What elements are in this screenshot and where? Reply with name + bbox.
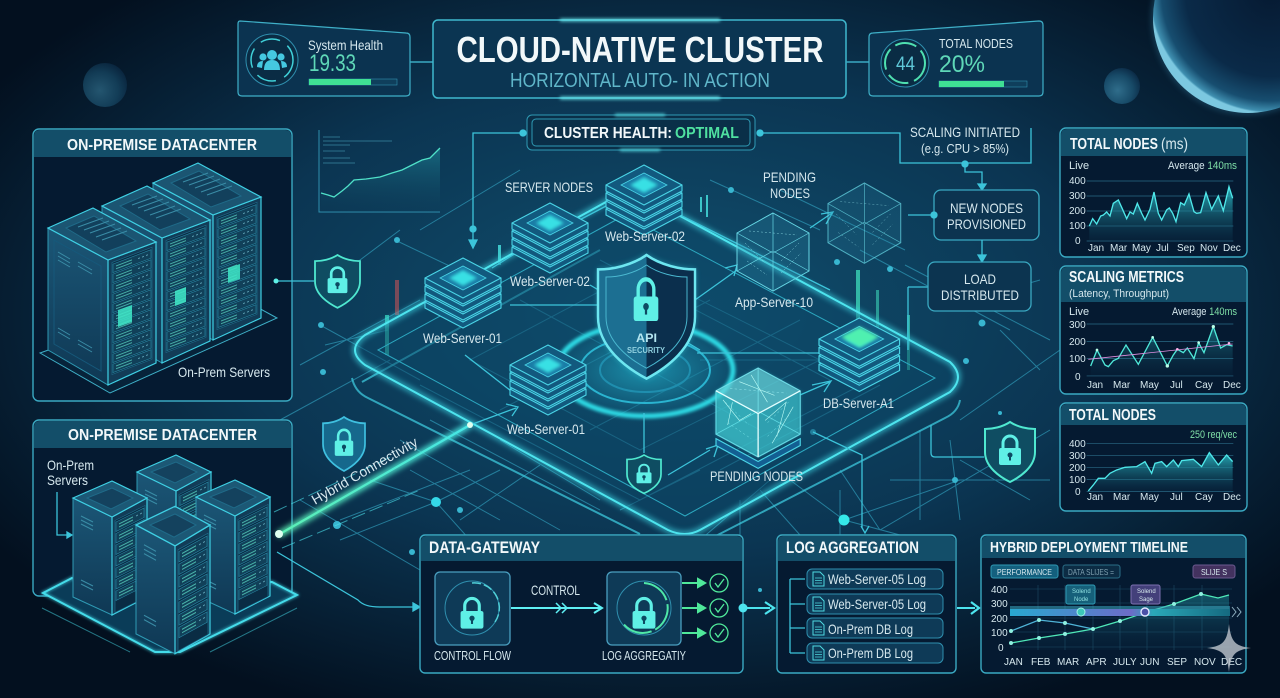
axis labels: 0 bbox=[998, 643, 1004, 654]
axis labels: NOV bbox=[1194, 657, 1216, 668]
axis labels: APR bbox=[1086, 657, 1107, 668]
area chart bbox=[1087, 443, 1233, 492]
cube: App-Server-10 bbox=[737, 213, 809, 291]
step: new nodes provisioned: NEW NODES bbox=[950, 200, 1023, 216]
axis labels: 200 bbox=[1069, 206, 1086, 217]
shield: bottom center bbox=[627, 455, 661, 493]
axis labels: 100 bbox=[1069, 221, 1086, 232]
text: control flow: CONTROL FLOW bbox=[434, 648, 512, 663]
log row 2 bbox=[807, 594, 943, 614]
panel: total nodes chart bbox=[1060, 128, 1247, 257]
shield: left bbox=[274, 255, 360, 308]
callout: solend node: Solend bbox=[1072, 589, 1091, 595]
background network grid bbox=[280, 170, 1060, 570]
heading: SCALING METRICS bbox=[1069, 269, 1184, 286]
step: new nodes provisioned bbox=[934, 190, 1039, 240]
callout: solend sage: Solend bbox=[1137, 589, 1156, 595]
panel: on-premise datacenter bottom bbox=[33, 420, 297, 654]
text: throughput: 250 req/vec bbox=[1190, 429, 1237, 441]
server rack back bbox=[137, 455, 211, 589]
axis labels: 400 bbox=[1069, 439, 1086, 450]
heading: ON-PREMISE DATACENTER bbox=[67, 137, 257, 154]
axis labels: 100 bbox=[991, 628, 1008, 639]
node: Web-Server-01 upper bbox=[425, 258, 501, 328]
step: load distributed: LOAD bbox=[964, 271, 996, 287]
floor platform bbox=[42, 578, 297, 652]
heading: HYBRID DEPLOYMENT TIMELINE bbox=[990, 539, 1188, 556]
panel: hybrid deployment timeline bbox=[981, 535, 1246, 673]
server rack C bbox=[153, 163, 261, 340]
axis labels bbox=[991, 585, 1242, 668]
axis labels: Dec bbox=[1223, 243, 1241, 254]
text: total nodes: TOTAL NODES bbox=[939, 36, 1013, 51]
server rack A bbox=[48, 208, 156, 385]
panel: total nodes throughput chart bbox=[1060, 403, 1247, 511]
line chart bbox=[1087, 181, 1233, 241]
log row 1: Web-Server-05 Log bbox=[828, 571, 926, 587]
callout: solend node bbox=[1066, 585, 1095, 604]
callout: solend sage bbox=[1131, 585, 1160, 604]
axis labels: Cay bbox=[1195, 380, 1213, 391]
floor base bbox=[40, 288, 277, 393]
axis labels: Dec bbox=[1223, 492, 1241, 503]
axis labels: DEC bbox=[1221, 657, 1242, 668]
scatter network nodes bbox=[318, 187, 1002, 592]
axis labels: 300 bbox=[1069, 191, 1086, 202]
axis labels: 100 bbox=[1069, 475, 1086, 486]
node: Web-Server-02 lower bbox=[512, 203, 588, 273]
caption: On-Prem bbox=[47, 457, 94, 473]
caption second line: Servers bbox=[47, 472, 88, 488]
planet: small top right bbox=[1104, 68, 1140, 104]
axis labels: Jul bbox=[1156, 243, 1169, 254]
text: log aggregatiy: LOG AGGREGATIY bbox=[602, 648, 686, 663]
text: live: Live bbox=[1069, 160, 1089, 172]
planet: large top right bbox=[1151, 0, 1280, 115]
axis labels: 300 bbox=[991, 599, 1008, 610]
icon: gauge ring: 44 bbox=[896, 54, 915, 75]
shield: hybrid bbox=[323, 417, 365, 471]
button: slije s bbox=[1193, 565, 1235, 578]
step connector bbox=[908, 212, 986, 350]
axis labels: Jul bbox=[1170, 380, 1183, 391]
arrow: gateway to log bbox=[738, 602, 774, 614]
icon: sparkle watermark bbox=[1207, 624, 1251, 672]
axis labels: Nov bbox=[1200, 243, 1218, 254]
scaling initiated text: (e.g. CPU > 85%) bbox=[921, 141, 1009, 156]
axis labels: JUN bbox=[1140, 657, 1159, 668]
button: performance: PERFORMANCE bbox=[997, 567, 1052, 577]
axis labels: 200 bbox=[991, 614, 1008, 625]
axis labels: 0 bbox=[1075, 487, 1081, 498]
axis labels: Dec bbox=[1223, 380, 1241, 391]
text: average: Average 140ms bbox=[1172, 306, 1237, 318]
scaling initiated text: SCALING INITIATED bbox=[910, 124, 1020, 140]
connector: to data gateway bbox=[277, 552, 420, 611]
label: SECURITY: SECURITY bbox=[627, 346, 666, 355]
axis labels: 300 bbox=[1069, 451, 1086, 462]
axis labels bbox=[1069, 439, 1241, 503]
status highlights bbox=[118, 264, 240, 327]
cluster health badge bbox=[527, 115, 755, 150]
text: cluster health: CLUSTER HEALTH: bbox=[544, 125, 672, 142]
mini background chart bbox=[319, 130, 440, 212]
text: db server: DB-Server-A1 bbox=[823, 395, 894, 411]
icon: gauge ring bbox=[881, 39, 929, 87]
text: control: CONTROL bbox=[531, 582, 580, 598]
system health card bbox=[238, 21, 433, 96]
server rack right bbox=[196, 480, 270, 614]
axis labels: 400 bbox=[991, 585, 1008, 596]
panel: on-premise datacenter top bbox=[33, 129, 292, 401]
arrow: control bbox=[511, 603, 602, 613]
caption arrow bbox=[57, 492, 72, 538]
text: web server 02 upper: Web-Server-02 bbox=[605, 228, 685, 244]
text: system health: System Health bbox=[308, 37, 383, 53]
heading unit: (ms) bbox=[1161, 136, 1188, 153]
security rings bbox=[553, 322, 737, 418]
axis labels: JULY bbox=[1113, 657, 1137, 668]
text: nodes: NODES bbox=[770, 185, 810, 201]
cube: pending upper bbox=[828, 183, 901, 263]
log row 3 bbox=[807, 618, 943, 638]
button: data slices: DATA SLIJES = bbox=[1068, 567, 1114, 577]
heading: TOTAL NODES bbox=[1069, 407, 1156, 424]
server rack left bbox=[73, 481, 147, 615]
panel: data gateway bbox=[420, 535, 743, 673]
log row 2: Web-Server-05 Log bbox=[828, 596, 926, 612]
text: web server 01 lower: Web-Server-01 bbox=[507, 421, 585, 437]
heading: ON-PREMISE DATACENTER bbox=[68, 427, 257, 444]
axis labels: MAR bbox=[1057, 657, 1079, 668]
arrow: log to timeline bbox=[957, 602, 979, 614]
subtitle: HORIZONTAL AUTO- IN ACTION bbox=[510, 69, 770, 92]
cube: pending lower bright bbox=[716, 368, 800, 468]
node: DB-Server-A1 bbox=[819, 318, 900, 392]
tile: log aggregation lock bbox=[607, 572, 681, 645]
timeline chart bbox=[1009, 585, 1241, 650]
axis labels: 0 bbox=[1075, 236, 1081, 247]
candle decorations bbox=[385, 195, 910, 370]
tree connector bbox=[790, 579, 805, 653]
hybrid connectivity beam bbox=[274, 422, 473, 548]
text: optimal: OPTIMAL bbox=[675, 125, 739, 142]
axis labels: Jan bbox=[1088, 243, 1104, 254]
server rack front bbox=[136, 506, 210, 654]
status checks bbox=[682, 574, 728, 642]
heading: LOG AGGREGATION bbox=[786, 538, 919, 557]
axis labels: 300 bbox=[1069, 320, 1086, 331]
text: live: Live bbox=[1069, 306, 1089, 318]
axis labels: Mar bbox=[1113, 380, 1131, 391]
axis labels: 200 bbox=[1069, 463, 1086, 474]
planet: small top left bbox=[83, 63, 127, 107]
connector: cluster health to web server bbox=[469, 130, 526, 248]
title box bbox=[433, 20, 846, 98]
label: API: API bbox=[636, 331, 657, 345]
panel: scaling metrics chart bbox=[1060, 266, 1247, 394]
text: web server 02 lower: Web-Server-02 bbox=[510, 273, 590, 289]
text: percentage: 20% bbox=[939, 51, 985, 78]
line chart bbox=[1087, 324, 1233, 376]
text: app server: App-Server-10 bbox=[735, 294, 813, 310]
icon: lock bbox=[634, 279, 658, 321]
axis labels: Mar bbox=[1113, 492, 1131, 503]
subheading: (Latency, Throughput) bbox=[1069, 288, 1169, 300]
tile: control flow lock bbox=[435, 572, 510, 645]
main API security shield bbox=[598, 255, 695, 379]
total nodes card bbox=[846, 21, 1043, 96]
axis labels: SEP bbox=[1167, 657, 1187, 668]
axis labels: 0 bbox=[1075, 372, 1081, 383]
text: server nodes: SERVER NODES bbox=[505, 179, 593, 195]
progress bar bbox=[309, 79, 397, 85]
progress bar bbox=[939, 81, 1027, 87]
axis labels: Cay bbox=[1195, 492, 1213, 503]
axis labels: May bbox=[1140, 380, 1159, 391]
icon: team ring bbox=[246, 34, 298, 86]
text: pending nodes: PENDING NODES bbox=[710, 468, 803, 484]
platform flow arrows bbox=[465, 205, 869, 533]
text: hybrid connectivity: Hybrid Connectivity bbox=[308, 434, 420, 508]
button: data slices bbox=[1063, 565, 1120, 578]
button: slije s: SLIJE S bbox=[1201, 567, 1227, 577]
step: load distributed: DISTRIBUTED bbox=[941, 287, 1019, 303]
caption: On-Prem Servers bbox=[178, 364, 270, 380]
heading: DATA-GATEWAY bbox=[429, 538, 541, 557]
callout: solend node: Node bbox=[1074, 597, 1089, 603]
button: performance bbox=[991, 565, 1058, 578]
log row 1 bbox=[807, 569, 943, 589]
node: Web-Server-02 upper bbox=[606, 165, 682, 235]
axis labels: May bbox=[1132, 243, 1151, 254]
axis labels: JAN bbox=[1004, 657, 1023, 668]
step: new nodes provisioned: PROVISIONED bbox=[947, 216, 1026, 232]
axis labels: 200 bbox=[1069, 337, 1086, 348]
heading: TOTAL NODES bbox=[1070, 136, 1158, 153]
axis labels: Jan bbox=[1087, 492, 1103, 503]
axis labels: 100 bbox=[1069, 354, 1086, 365]
node labels bbox=[423, 169, 894, 484]
axis labels bbox=[1069, 176, 1241, 254]
title: CLOUD-NATIVE CLUSTER bbox=[456, 29, 824, 70]
text: web server 01 upper: Web-Server-01 bbox=[423, 330, 502, 346]
text: average: Average 140ms bbox=[1168, 160, 1237, 172]
central platform bbox=[352, 193, 960, 540]
log row 3: On-Prem DB Log bbox=[828, 621, 913, 637]
axis labels: Sep bbox=[1177, 243, 1195, 254]
axis labels bbox=[1069, 320, 1241, 391]
node: Web-Server-01 lower bbox=[510, 345, 586, 415]
axis labels: 400 bbox=[1069, 176, 1086, 187]
axis labels: Mar bbox=[1110, 243, 1128, 254]
step: load distributed bbox=[928, 262, 1031, 311]
axis labels: Jan bbox=[1087, 380, 1103, 391]
shield: right bbox=[931, 422, 1035, 482]
server rack B bbox=[102, 186, 210, 363]
connector: cluster health to scaling bbox=[757, 128, 1031, 190]
callout: solend sage: Sage bbox=[1139, 597, 1154, 603]
log row 4 bbox=[807, 643, 943, 663]
axis labels: May bbox=[1140, 492, 1159, 503]
axis labels: Jul bbox=[1170, 492, 1183, 503]
text: value: 19.33 bbox=[309, 50, 356, 77]
axis labels: FEB bbox=[1031, 657, 1051, 668]
log row 4: On-Prem DB Log bbox=[828, 645, 913, 661]
scaling initiated text bbox=[910, 124, 1020, 156]
text: pending: PENDING bbox=[763, 169, 816, 185]
panel: log aggregation bbox=[777, 535, 956, 673]
